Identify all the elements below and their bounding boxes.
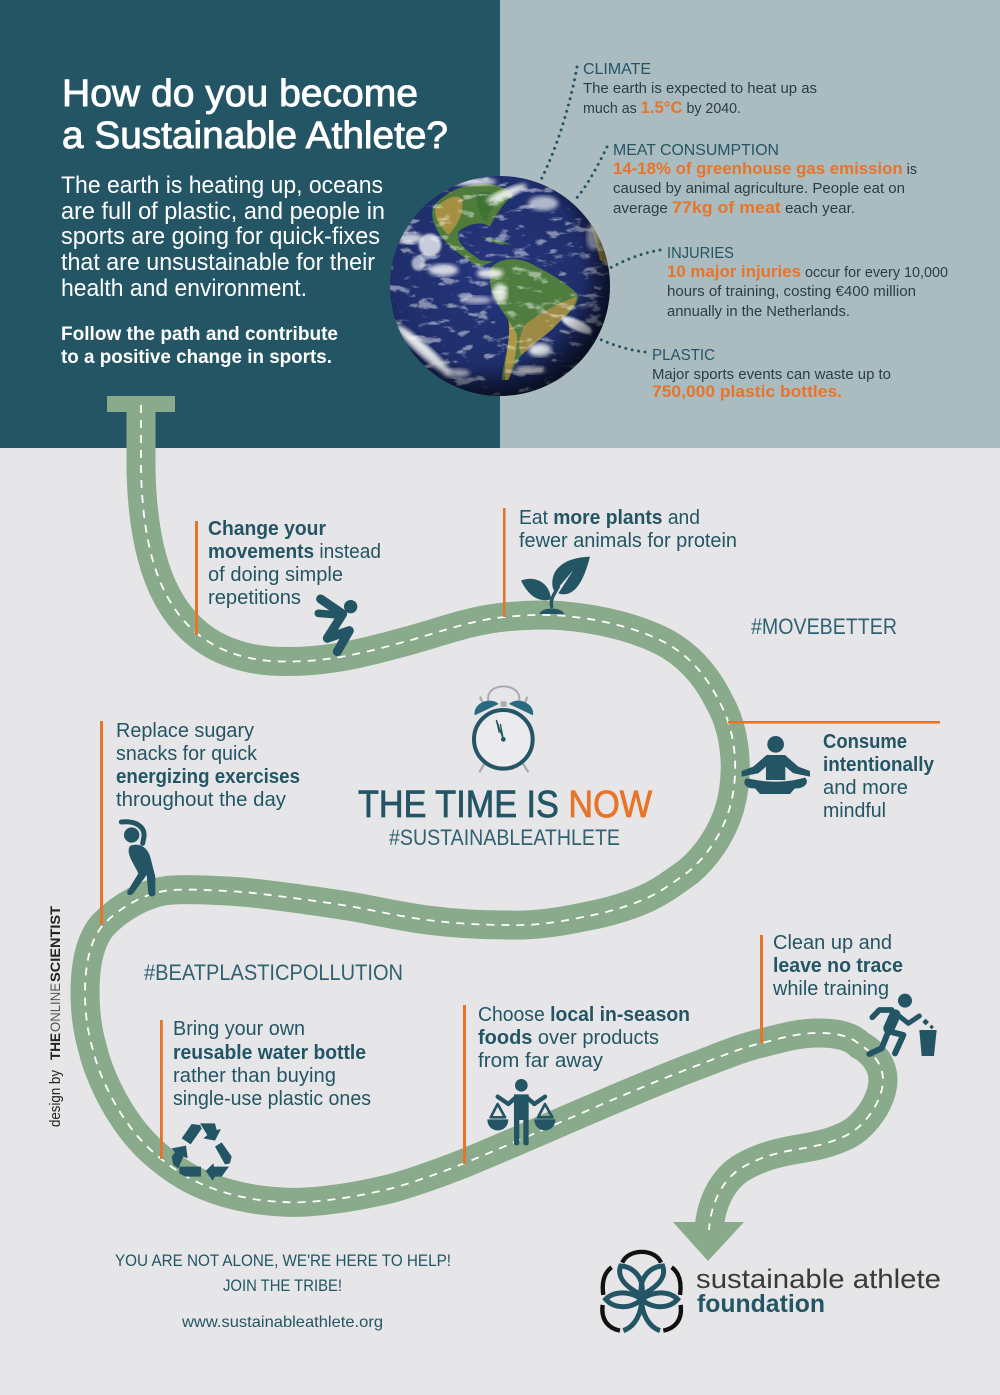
fact: climate: The earth is expected to heat up as <box>583 81 817 97</box>
logo: sustainable athlete foundation: foundation <box>697 1290 825 1318</box>
call to action <box>61 324 338 368</box>
fact: plastic: PLASTIC <box>652 347 715 364</box>
panel: facts <box>500 0 1000 448</box>
design credit: ONLINE <box>48 983 63 1032</box>
intro paragraph: are full of plastic, and people in <box>61 198 385 225</box>
step: replace sugary snacks: Replace sugary <box>116 720 254 742</box>
call to action: to a positive change in sports. <box>61 347 332 368</box>
call to join: JOIN THE TRIBE! <box>223 1277 342 1295</box>
dotted connectors <box>541 67 660 352</box>
step: clean up and leave no trace <box>760 932 937 1056</box>
earth globe <box>390 176 610 396</box>
icon: meditating person <box>742 736 810 794</box>
design credit: SCIENTIST <box>48 905 63 982</box>
intro paragraph: health and environment. <box>61 275 307 302</box>
step: consume intentionally: and more <box>823 777 908 799</box>
title <box>62 73 448 157</box>
title: How do you become <box>62 73 418 115</box>
step: replace sugary snacks <box>100 720 300 925</box>
fact: injuries <box>667 245 948 320</box>
fact: plastic: 750,000 plastic bottles. <box>652 382 842 401</box>
design credit: THE <box>48 1033 63 1060</box>
design credit <box>48 905 64 1127</box>
intro paragraph <box>61 172 385 302</box>
south america <box>490 259 578 380</box>
fact: injuries: hours of training, costing €400 million <box>667 284 916 300</box>
call to join: www.sustainableathlete.org <box>181 1314 383 1331</box>
caribbean <box>480 236 513 245</box>
fact: climate: much as 1.5°C by 2040. <box>583 98 741 117</box>
fact: meat consumption <box>613 142 917 217</box>
panel: intro <box>0 0 500 448</box>
headline: the time is now: THE TIME IS NOW <box>358 784 652 826</box>
step: change your movements: Change your <box>208 518 326 540</box>
hashtag: move better: #MOVEBETTER <box>751 614 897 639</box>
icon: recycling arrows <box>172 1123 232 1181</box>
fact: meat consumption: caused by animal agriculture. People eat on <box>613 181 905 197</box>
fact: meat consumption: average 77kg of meat each year. <box>613 198 855 217</box>
cloud masses <box>392 178 600 379</box>
design credit: design by <box>48 1069 64 1127</box>
fact: climate: CLIMATE <box>583 61 651 78</box>
logo: sustainable athlete foundation <box>602 1252 941 1331</box>
step: reusable water bottle <box>160 1018 371 1181</box>
fact: climate <box>583 61 817 117</box>
fact: meat consumption: 14-18% of greenhouse gas emission is <box>613 159 917 178</box>
intro paragraph: that are unsustainable for their <box>61 249 375 276</box>
limb shading <box>390 176 610 396</box>
fact: injuries: annually in the Netherlands. <box>667 304 850 320</box>
step: consume intentionally <box>728 721 940 822</box>
icon: stretching person <box>121 822 155 896</box>
logo: sustainable athlete foundation: sustainable athlete <box>696 1264 941 1294</box>
step: reusable water bottle: Bring your own <box>173 1018 305 1040</box>
call to join <box>115 1252 451 1331</box>
step: replace sugary snacks: snacks for quick <box>116 743 258 765</box>
icon: jumping athlete <box>318 599 357 652</box>
step: eat more plants: fewer animals for protein <box>519 530 737 552</box>
alarm clock icon <box>474 686 533 772</box>
step: reusable water bottle: single-use plastic ones <box>173 1088 371 1110</box>
hashtag: beat plastic pollution: #BEATPLASTICPOLLUTION <box>144 960 403 985</box>
winding road path <box>85 396 883 1261</box>
intro paragraph: sports are going for quick-fixes <box>61 223 380 250</box>
fact: plastic <box>652 347 891 401</box>
step: consume intentionally: Consume <box>823 731 907 753</box>
step: change your movements <box>195 518 381 652</box>
step: eat more plants <box>503 507 737 617</box>
step: choose local foods: from far away <box>478 1050 603 1072</box>
icon: person with scales <box>487 1079 555 1145</box>
step: change your movements: of doing simple <box>208 564 343 586</box>
call to join: YOU ARE NOT ALONE, WE'RE HERE TO HELP! <box>115 1252 451 1270</box>
step: change your movements: movements instead <box>208 541 381 563</box>
intro paragraph: The earth is heating up, oceans <box>61 172 383 199</box>
step: choose local foods: Choose local in-season <box>478 1004 690 1026</box>
step: choose local foods <box>463 1004 690 1164</box>
icon: seedling <box>521 557 590 614</box>
step: reusable water bottle: reusable water bottle <box>173 1042 366 1064</box>
title: a Sustainable Athlete? <box>62 115 448 157</box>
step: eat more plants: Eat more plants and <box>519 507 700 529</box>
step: consume intentionally: mindful <box>823 800 886 822</box>
step: clean up and leave no trace: leave no trace <box>773 955 903 977</box>
step: choose local foods: foods over products <box>478 1027 659 1049</box>
call to action: Follow the path and contribute <box>61 324 338 345</box>
step: consume intentionally: intentionally <box>823 754 935 776</box>
step: replace sugary snacks: energizing exercises <box>116 766 300 788</box>
step: change your movements: repetitions <box>208 587 301 609</box>
step: replace sugary snacks: throughout the day <box>116 789 286 811</box>
fact: injuries: INJURIES <box>667 245 734 262</box>
step: reusable water bottle: rather than buying <box>173 1065 336 1087</box>
step: clean up and leave no trace: Clean up and <box>773 932 892 954</box>
north america <box>432 184 513 267</box>
cloud texture <box>390 176 610 396</box>
fact: meat consumption: MEAT CONSUMPTION <box>613 142 779 159</box>
icon: runner with bin <box>869 994 937 1056</box>
africa edge <box>590 224 608 266</box>
fact: injuries: 10 major injuries occur for every 10,000 <box>667 262 948 281</box>
fact: plastic: Major sports events can waste up to <box>652 367 891 383</box>
hashtag: sustainable athlete: #SUSTAINABLEATHLETE <box>389 825 620 850</box>
step: clean up and leave no trace: while training <box>772 978 889 1000</box>
